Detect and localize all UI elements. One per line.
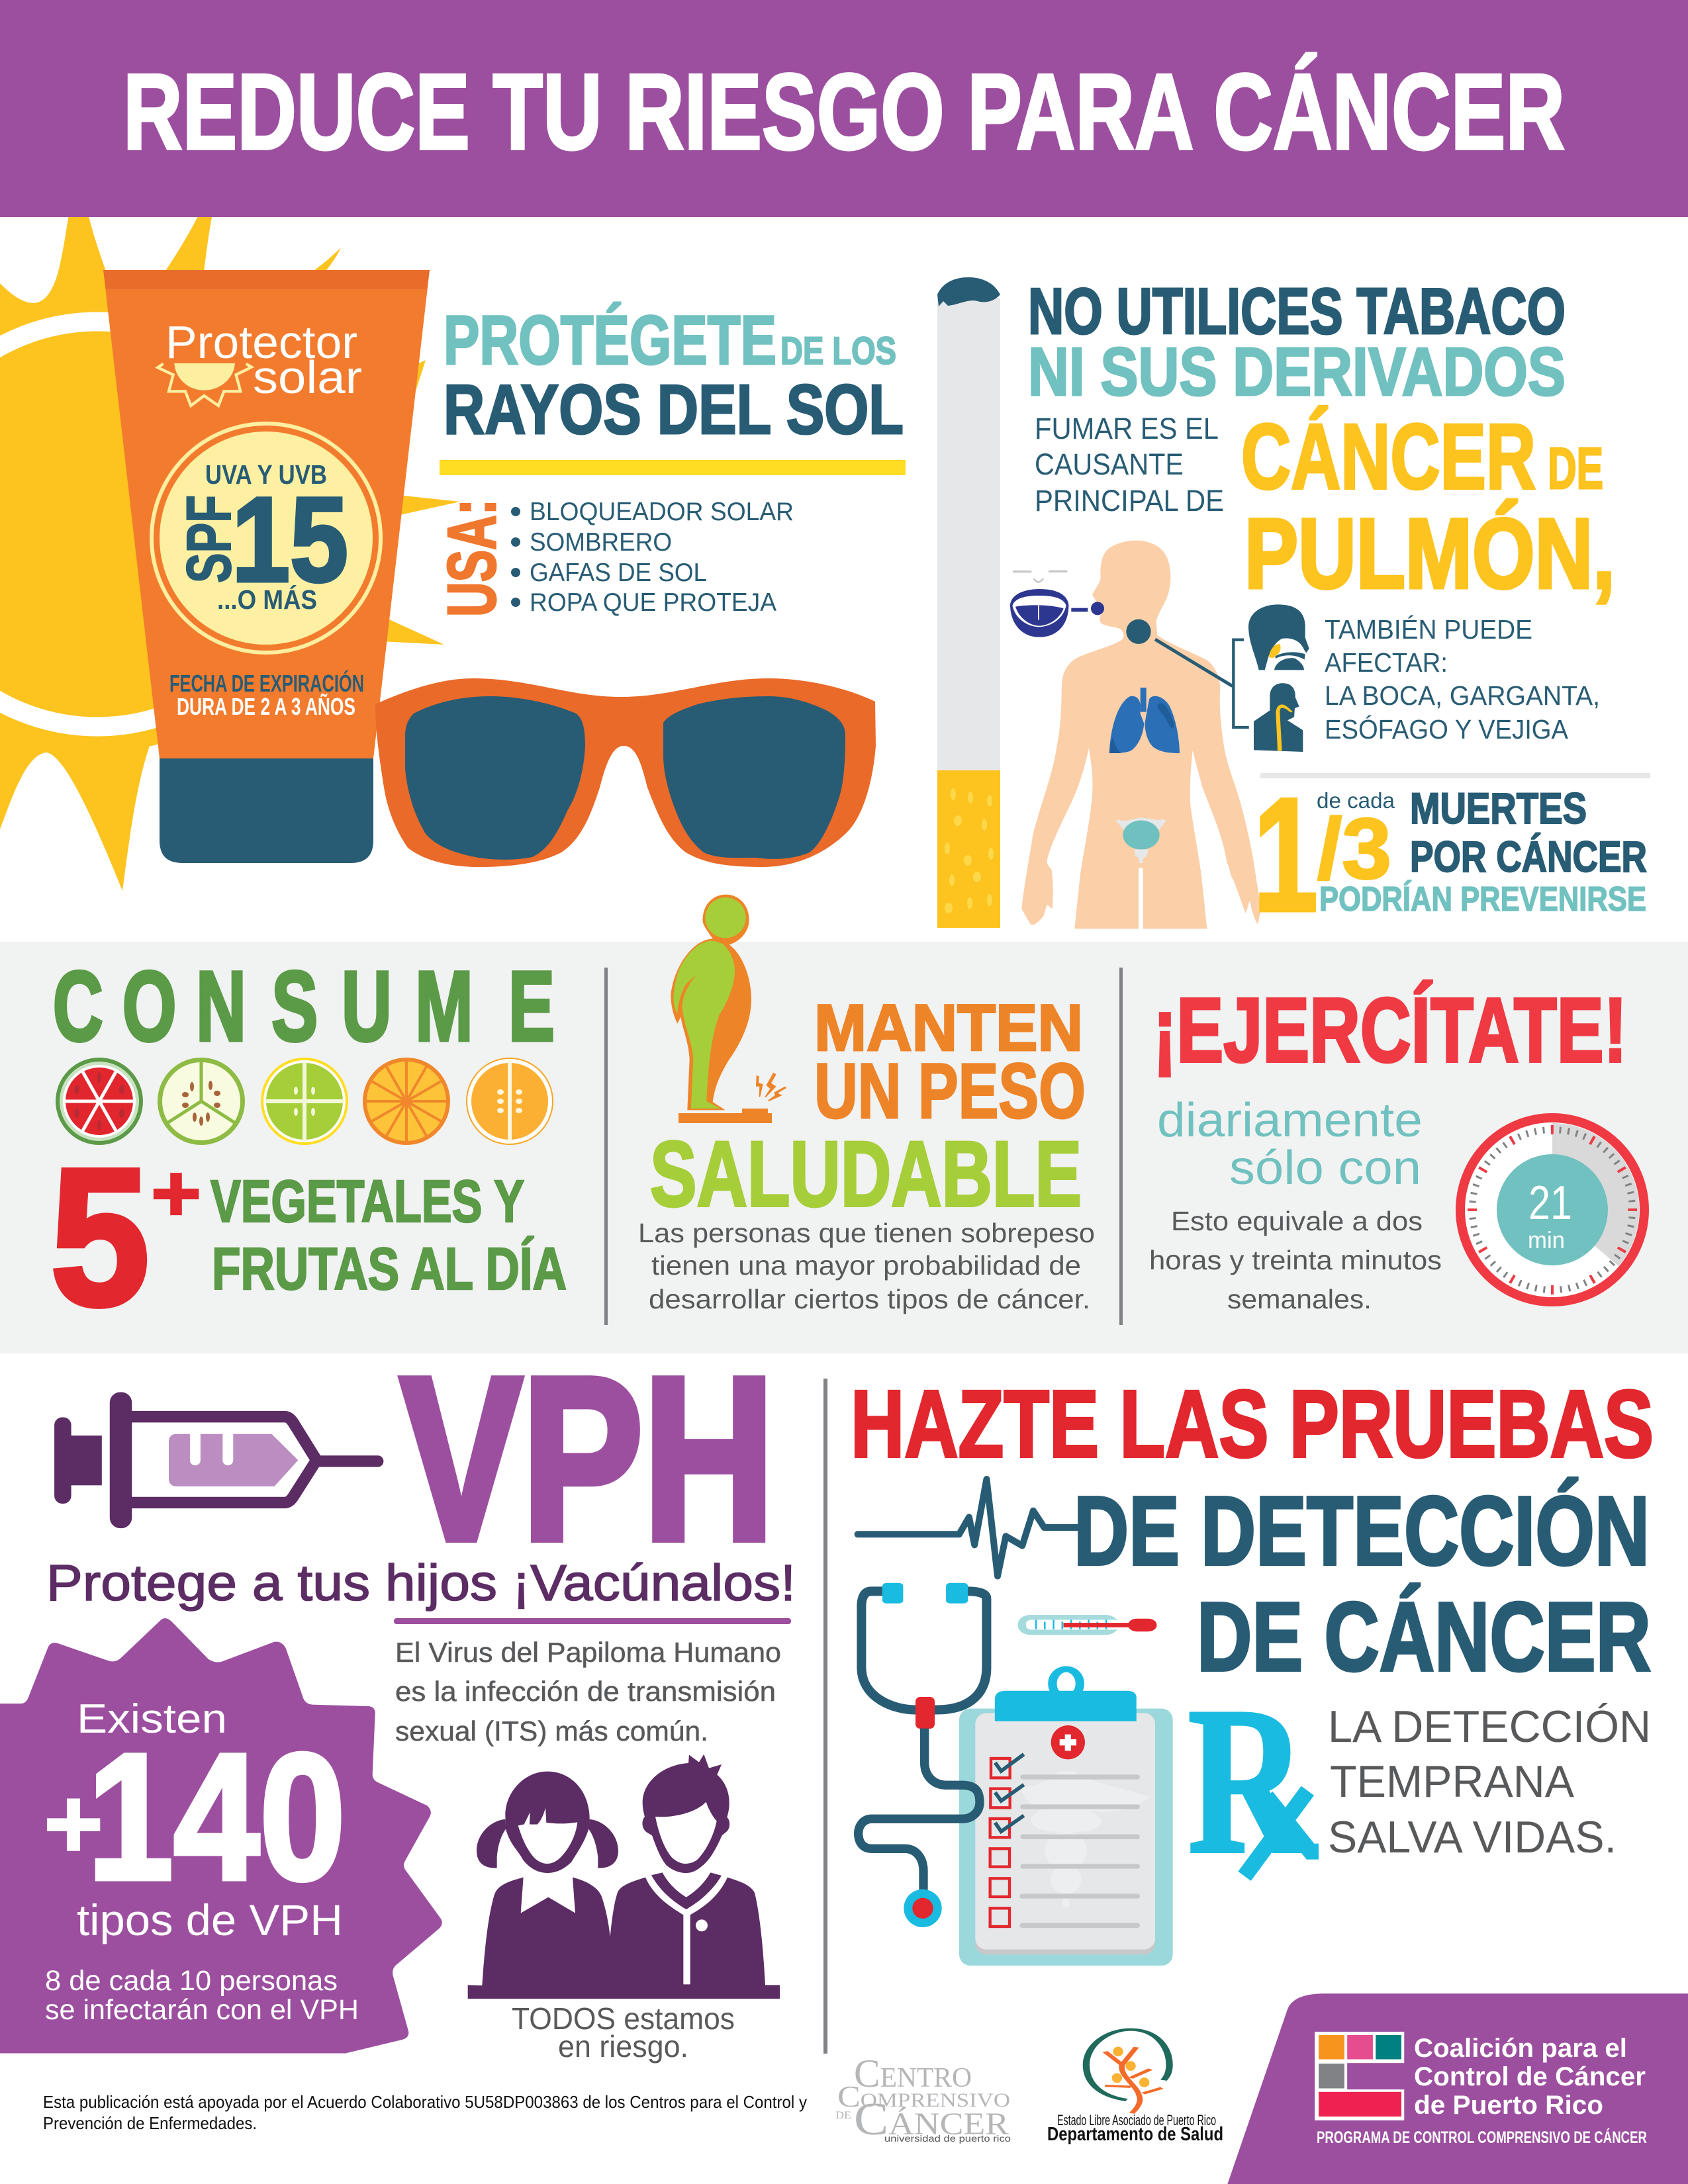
- panel: lifestyle band: [0, 895, 1688, 1353]
- stat: 5+: +: [151, 1149, 201, 1238]
- icon: head profiles: [1248, 604, 1309, 752]
- text: sobrepeso: tienen una mayor probabilidad de: [651, 1250, 1081, 1281]
- heading: protégete: RAYOS DEL SOL: [444, 371, 904, 449]
- expiration text: DURA DE 2 A 3 AÑOS: [177, 692, 355, 720]
- text: diariamente sólo con: [1157, 1094, 1423, 1195]
- expiration text: [169, 669, 364, 720]
- SPF seal: [152, 424, 381, 653]
- icon: person on scale: [671, 895, 786, 1123]
- icon: sun: [0, 217, 460, 891]
- text: sobrepeso: [638, 1218, 1095, 1314]
- icon: lungs: [1109, 688, 1180, 753]
- heading: no utilices tabaco: [1028, 275, 1566, 410]
- panel: consume: [50, 952, 567, 1346]
- heading: protégete: [444, 302, 904, 449]
- text: esto equivale: horas y treinta minutos: [1149, 1245, 1442, 1275]
- panel: header banner: [0, 0, 1688, 217]
- text: esto equivale: semanales.: [1227, 1284, 1372, 1314]
- SPF seal: 15: [232, 472, 348, 607]
- logo: Departamento de Salud: [1047, 2030, 1223, 2145]
- icon: sunglasses: [375, 678, 876, 867]
- heading: VPH: VPH: [400, 1330, 774, 1588]
- text: virus del papiloma: es la infección de transmisión: [395, 1676, 776, 1707]
- stat: 5+: 5: [50, 1128, 150, 1346]
- text: diariamente sólo con: diariamente: [1157, 1094, 1423, 1147]
- icon: human body: [1010, 541, 1309, 929]
- coalition name: Control de Cáncer: [1414, 2062, 1646, 2091]
- stat: 1 de cada 3 muertes: de cada: [1317, 788, 1395, 813]
- text: virus del papiloma: [395, 1637, 781, 1747]
- expiration text: FECHA DE EXPIRACIÓN: [169, 669, 364, 697]
- protection list: BLOQUEADOR SOLAR: [530, 498, 794, 526]
- icon: boy: [642, 1754, 729, 1909]
- logo: Centro Comprensivo de Cáncer: [835, 2052, 1011, 2145]
- text: vegetales y frutas: [211, 1169, 567, 1302]
- icon: coalition squares: [1315, 2032, 1405, 2120]
- protection list: GAFAS DE SOL: [530, 559, 707, 587]
- SPF seal: SPF: [174, 495, 244, 583]
- stat: 1 de cada 3 muertes: MUERTES: [1410, 784, 1587, 833]
- text: también puede afectar: TAMBIÉN PUEDE: [1325, 614, 1532, 645]
- heading: manten un peso saludable: SALUDABLE: [650, 1122, 1082, 1226]
- heading: no utilices tabaco: NI SUS DERIVADOS: [1028, 334, 1566, 410]
- heading: manten un peso saludable: UN PESO: [814, 1048, 1086, 1135]
- text: esto equivale: Esto equivale a dos: [1171, 1206, 1423, 1236]
- text: footnote: Prevención de Enfermedades.: [43, 2113, 257, 2133]
- icon: timer: min: [1528, 1226, 1565, 1253]
- text: fumar: PRINCIPAL DE: [1035, 484, 1224, 518]
- tube brand: [158, 316, 362, 406]
- icon: apple slice: [158, 1058, 245, 1145]
- icon: Rx symbol: R: [1188, 1664, 1309, 1898]
- coalition name: [1414, 2034, 1646, 2120]
- text: footnote: [43, 2092, 807, 2133]
- text: fumar: FUMAR ES EL: [1035, 412, 1219, 445]
- text: también puede afectar: LA BOCA, GARGANTA,: [1325, 680, 1600, 711]
- logo: Centro Comprensivo de Cáncer: CÁNCER: [854, 2094, 1009, 2145]
- SPF seal: UVA Y UVB: [205, 459, 327, 490]
- coalition name: de Puerto Rico: [1414, 2091, 1603, 2120]
- callout: starburst 140 types: tipos de VPH: [77, 1895, 343, 1944]
- protection list: ROPA QUE PROTEJA: [530, 588, 776, 617]
- protection list: [511, 498, 794, 617]
- icon: melon slice: [466, 1058, 553, 1145]
- icon: throat marker: [1126, 619, 1249, 727]
- stat: 1 de cada 3 muertes: 1: [1253, 764, 1318, 945]
- logo: Departamento de Salud: Departamento de Salud: [1047, 2124, 1223, 2145]
- icon: mouth: [1010, 571, 1104, 637]
- coalition name: Coalición para el: [1414, 2034, 1627, 2063]
- heading: hazte las pruebas: [851, 1371, 1654, 1692]
- icon: syringe: [54, 1392, 378, 1528]
- text: footnote: Esta publicación está apoyada por el Acuerdo Colaborativo 5U58DP003863 de los Centros para el Control y: [43, 2092, 807, 2112]
- text: la detección temprana: [1328, 1702, 1651, 1862]
- logo: Centro Comprensivo de Cáncer: DE: [835, 2110, 851, 2121]
- icon: children: [468, 1754, 780, 1999]
- text: todos estamos: [512, 2001, 735, 2064]
- heading: cáncer de pulmón: [1241, 404, 1615, 609]
- logo: Centro Comprensivo de Cáncer: CENTRO: [854, 2052, 972, 2095]
- callout: starburst 140 types: Existen: [77, 1696, 227, 1742]
- callout: starburst 140 types: se infectarán con el VPH: [45, 1994, 359, 2026]
- stat: 1 de cada 3 muertes: [1253, 764, 1647, 945]
- text: la detección temprana: LA DETECCIÓN: [1328, 1702, 1651, 1752]
- callout: starburst 140 types: [0, 1618, 442, 2054]
- icon: grapefruit: [56, 1058, 143, 1145]
- icon: cigarette: [937, 277, 1000, 928]
- text: la detección temprana: SALVA VIDAS.: [1328, 1812, 1617, 1862]
- heading: protégete: PROTÉGETE: [444, 302, 776, 379]
- text: fumar: CAUSANTE: [1035, 447, 1184, 481]
- text: también puede afectar: [1325, 614, 1600, 745]
- icon: bladder: [1116, 818, 1166, 863]
- heading: protege a tus hijos: Protege a tus hijos ¡Vacúnalos!: [46, 1555, 796, 1612]
- tube brand: Protector: [165, 316, 357, 368]
- icon: heartbeat line: [858, 1479, 1080, 1576]
- heading: manten un peso saludable: MANTEN: [814, 991, 1083, 1064]
- callout: starburst 140 types: +: [44, 1768, 103, 1879]
- icon: children bodies: [468, 1878, 780, 1999]
- callout: starburst 140 types: 8 de cada 10 personas: [45, 1965, 338, 1997]
- text: diariamente sólo con: sólo con: [1229, 1142, 1421, 1195]
- logo: Centro Comprensivo de Cáncer: COMPRENSIVO: [837, 2080, 1010, 2113]
- text: también puede afectar: ESÓFAGO Y VEJIGA: [1325, 714, 1569, 745]
- text: fumar: [1035, 412, 1224, 518]
- icon: girl: [477, 1772, 618, 1873]
- logo: Departamento de Salud: Estado Libre Asociado de Puerto Rico: [1057, 2112, 1216, 2128]
- icon: stethoscope tube and chest piece: [859, 1697, 980, 1927]
- text: virus del papiloma: sexual (ITS) más común.: [395, 1715, 708, 1747]
- panel: exercise: [1149, 979, 1644, 1314]
- usa label: USA:: [434, 499, 510, 617]
- text: vegetales y frutas: VEGETALES Y: [211, 1169, 524, 1235]
- icon: lime slice: [261, 1058, 348, 1145]
- heading: protégete: DE LOS: [780, 330, 896, 373]
- SPF seal: ...O MÁS: [217, 584, 317, 615]
- text: sobrepeso: desarrollar ciertos tipos de cáncer.: [649, 1284, 1090, 1314]
- icon: sunscreen tube: [103, 270, 430, 863]
- text: también puede afectar: AFECTAR:: [1325, 647, 1448, 678]
- text: esto equivale: [1149, 1206, 1442, 1314]
- callout: starburst 140 types: 140: [87, 1716, 346, 1917]
- text: todos estamos: en riesgo.: [558, 2029, 688, 2064]
- heading: cáncer de pulmón: CÁNCER: [1241, 404, 1536, 508]
- panel: coalition logo: [1227, 1993, 1688, 2184]
- text: virus del papiloma: El Virus del Papiloma Humano: [395, 1637, 781, 1668]
- protection list: SOMBRERO: [530, 528, 672, 557]
- icon: clipboard: [959, 1669, 1173, 1966]
- panel: healthy weight: [638, 895, 1095, 1314]
- logo: Centro Comprensivo de Cáncer: universidad de puerto rico: [884, 2133, 1011, 2144]
- heading: cáncer de pulmón: DE: [1548, 435, 1603, 501]
- heading: consume: CONSUME: [53, 952, 555, 1062]
- text: sobrepeso: Las personas que tienen sobrepeso: [638, 1218, 1095, 1248]
- icon: orange slice: [363, 1058, 450, 1145]
- text: todos estamos: TODOS estamos: [512, 2001, 735, 2036]
- text: vegetales y frutas: FRUTAS AL DÍA: [212, 1236, 567, 1302]
- tube brand: solar: [253, 351, 362, 403]
- text: la detección temprana: TEMPRANA: [1330, 1756, 1575, 1807]
- panel: tobacco: [937, 275, 1650, 945]
- icon: stethoscope: [861, 1583, 986, 1709]
- icon: timer: 21: [1528, 1177, 1572, 1230]
- stat: 1 de cada 3 muertes: /3: [1317, 800, 1391, 897]
- heading: manten un peso saludable: [650, 991, 1086, 1226]
- icon: thermometer: [1018, 1615, 1156, 1635]
- panel: HPV: [0, 1330, 796, 2064]
- panel: sun protection: [0, 217, 906, 891]
- icon: timer: [1460, 1118, 1644, 1302]
- panel: screening: [851, 1371, 1654, 1966]
